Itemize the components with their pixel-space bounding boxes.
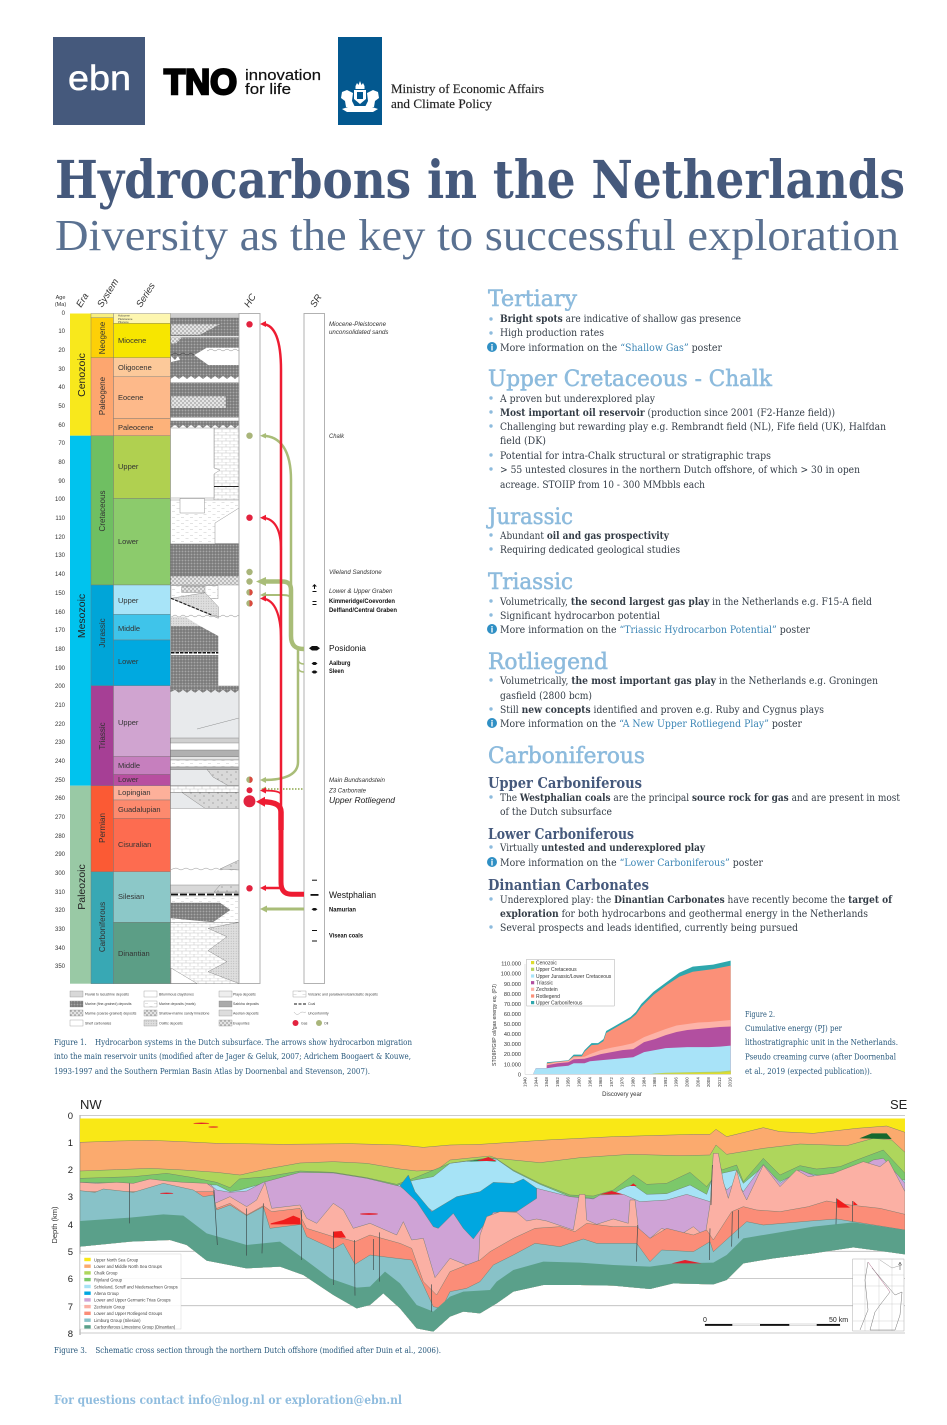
chart: cumulative energy per unit [492, 959, 733, 1098]
column headers: System [95, 277, 121, 310]
icon: info [487, 718, 497, 728]
chart y axis: 60.000 [504, 1012, 521, 1018]
chart y axis: 80.000 [504, 992, 521, 998]
text panel: Upper Cretaceous - Chalk: > 55 untested closures in the northern Dutch offshore, of which > 30 in open [500, 465, 860, 476]
source rock and reservoir labels: Miocene-Pleistocene [329, 322, 387, 328]
icon: info [487, 342, 497, 352]
legend labels: Playa deposits [233, 992, 256, 996]
series labels: Silesian [118, 892, 144, 901]
chart x axis: 2012 [717, 1077, 722, 1087]
text panel: Rotliegend: Rotliegend [488, 650, 608, 675]
age axis: 210 [55, 703, 66, 709]
age axis: 350 [55, 964, 66, 970]
age axis: 160 [55, 610, 66, 616]
text panel: Upper Cretaceous - Chalk: field (DK) [500, 436, 546, 447]
legend labels: Aeolian deposits [233, 1012, 259, 1016]
age axis: 250 [55, 778, 66, 784]
chart x axis: 2004 [695, 1077, 700, 1087]
text panel: Triassic: More information on the “Triassic Hydrocarbon Potential” poster [500, 625, 810, 636]
column headers [55, 277, 325, 310]
text panel: Triassic: Volumetrically, the second largest gas play in the Netherlands e.g. F15-A field [499, 597, 873, 608]
series column [114, 314, 170, 984]
text panel: Carboniferous: of the Dutch subsurface [500, 807, 612, 818]
legend labels: Marine deposits (marls) [159, 1002, 196, 1006]
column headers: HC [242, 292, 259, 310]
text panel: Carboniferous: Lower Carboniferous [488, 826, 634, 843]
age axis: 40 [58, 385, 66, 391]
text panel: Jurassic: Jurassic [486, 505, 573, 530]
scale bar: 0 [703, 1317, 707, 1324]
system labels: Paleogene [98, 376, 107, 415]
age axis: 230 [55, 740, 66, 746]
text panel: Rotliegend: Volumetrically, the most important gas play in the Netherlands e.g. Groningen [499, 676, 878, 687]
caption: figure 1: into the main reservoir units (modified after de Jager & Geluk, 2007; Adrichem Boogaert & Kouwe, [54, 1051, 411, 1062]
contact line: For questions contact info@nlog.nl or exploration@ebn.nl [54, 1393, 402, 1407]
logo: Ministry of Economic Affairs and Climate Policy: Ministry of Economic Affairs [391, 82, 544, 96]
depth axis: Depth (km) [50, 1206, 59, 1244]
lithology legend [70, 991, 322, 1026]
chart y axis: 20.000 [504, 1052, 521, 1058]
age axis: 200 [55, 684, 66, 690]
icon: coat of arms [341, 81, 379, 112]
text panel: Carboniferous: exploration for both hydrocarbons and geothermal energy in the Netherlands [500, 909, 868, 920]
system labels [98, 321, 107, 952]
chart x axis: Discovery year [602, 1092, 642, 1098]
series labels: Miocene [118, 336, 146, 345]
age axis: 170 [55, 628, 66, 634]
chart x axis: 1964 [587, 1077, 592, 1087]
series labels: Upper [118, 462, 139, 471]
cross section legend: Rijnland Group [94, 1277, 123, 1282]
gas migration arrows [256, 321, 304, 894]
age axis: 70 [58, 441, 66, 447]
logo: TNO innovation for life: innovation [245, 68, 321, 84]
age axis: 130 [55, 553, 66, 559]
source rock and reservoir labels [328, 322, 397, 940]
cross section legend: Lower and Upper Germanic Trias Groups [94, 1298, 171, 1303]
age axis [55, 311, 66, 970]
depth axis: 6 [68, 1274, 73, 1285]
column headers: SR [308, 292, 325, 310]
text panel: Tertiary [487, 287, 741, 354]
chart legend: Upper Carboniferous [536, 1000, 583, 1006]
chart x axis: 1956 [566, 1077, 571, 1087]
icon: info [487, 624, 497, 634]
source rock and reservoir labels: Chalk [329, 434, 345, 440]
chart x axis: 1968 [598, 1077, 603, 1087]
cross section legend: Limburg Group (Silesian) [94, 1318, 141, 1323]
cross section legend: Zechstein Group [94, 1304, 126, 1309]
age axis: 320 [55, 908, 66, 914]
chart legend: Rotliegend [536, 994, 560, 1000]
text panel: Jurassic: Requiring dedicated geological studies [500, 545, 680, 556]
era column: Paleozoic [76, 864, 88, 910]
system labels: Jurassic [98, 618, 107, 648]
cross section legend: Upper North Sea Group [94, 1257, 139, 1262]
age axis: 90 [58, 479, 66, 485]
system labels: Cretaceous [98, 491, 107, 531]
scale bar: 50 km [829, 1317, 848, 1324]
cross section legend: Carboniferous Limestone Group (Dinantian) [94, 1325, 176, 1330]
system labels: Triassic [98, 722, 107, 750]
scale bar [703, 1317, 848, 1326]
legend labels: Fluvial to lacustrine deposits [85, 992, 129, 996]
source rock and reservoir labels: Aalburg [329, 661, 351, 667]
series labels: Lower [118, 537, 139, 546]
age axis: 260 [55, 796, 66, 802]
chart y axis: 50.000 [504, 1022, 521, 1028]
chart y axis: 90.000 [504, 982, 521, 988]
faults [129, 1165, 853, 1312]
depth axis: 2 [68, 1165, 73, 1176]
series labels: Pliocene [118, 320, 129, 324]
text panel: Rotliegend: gasfield (2800 bcm) [500, 691, 592, 702]
legend labels: Shallow-marine sandy limestone [159, 1012, 209, 1016]
era column: Cenozoic [76, 353, 88, 397]
caption: figure 2: lithostratigraphic unit in the Netherlands. [745, 1038, 898, 1048]
chart legend: Triassic [536, 981, 554, 987]
source rock and reservoir labels: Z3 Carbonate [328, 788, 367, 794]
column headers: Age [56, 295, 65, 301]
series labels: Guadalupian [118, 805, 161, 814]
chart x axis: 1972 [609, 1077, 614, 1087]
text panel: Triassic: Significant hydrocarbon potential [500, 611, 660, 622]
text panel: Triassic: Triassic [488, 570, 573, 595]
chart x axis: 1988 [652, 1077, 657, 1087]
chart x axis: 2008 [706, 1077, 711, 1087]
age axis: 100 [55, 497, 66, 503]
source rock and reservoir labels: Delfland/Central Graben [329, 608, 397, 614]
age axis: 150 [55, 591, 66, 597]
age axis: 120 [55, 535, 66, 541]
legend labels: Gas [301, 1022, 308, 1026]
legend labels: Oil [324, 1022, 328, 1026]
cross section legend: Lower and Middle North Sea Groups [94, 1264, 162, 1269]
source rock and reservoir labels: Visean coals [329, 934, 364, 940]
text panel: Upper Cretaceous - Chalk: Most important oil reservoir (production since 2001 (F2-Hanze field)) [500, 408, 835, 419]
text panel: Tertiary: High production rates [500, 328, 604, 339]
icon: info: i [491, 342, 493, 352]
source rock and reservoir labels: Main Bundsandstein [329, 778, 386, 784]
source rock and reservoir labels: unconsolidated sands [329, 330, 388, 336]
text panel: Carboniferous [487, 744, 900, 934]
chart x axis: 2000 [684, 1077, 690, 1087]
cross section legend [80, 1254, 181, 1330]
text panel: Carboniferous: Upper Carboniferous [488, 775, 642, 792]
chart legend: Zechstein [536, 987, 558, 993]
cross section legend: Chalk Group [94, 1271, 118, 1276]
text panel: Jurassic: Abundant oil and gas prospectivity [499, 531, 670, 542]
cross section legend: Schieland, Scruff and Niedersachsen Groups [94, 1284, 178, 1289]
caption: figure 1 [54, 1038, 412, 1077]
age axis: 110 [55, 516, 66, 522]
legend labels: Sabkha deposits [233, 1002, 259, 1006]
system column [91, 314, 114, 984]
gas and oil fields [160, 1123, 892, 1263]
age axis: 140 [55, 572, 66, 578]
source rock and reservoir labels: Sleen [329, 669, 344, 675]
text panel: Tertiary: Bright spots are indicative of shallow gas presence [500, 314, 741, 325]
source rock and reservoir labels: Westphalian [329, 890, 376, 900]
age axis: 240 [55, 759, 66, 765]
chart x axis: 1960 [576, 1077, 582, 1087]
source rock and reservoir labels: Posidonia [329, 644, 367, 653]
text panel: Upper Cretaceous - Chalk: Upper Cretaceous - Chalk [488, 367, 773, 392]
text panel: Carboniferous: Carboniferous [488, 744, 645, 769]
chart legend: Upper Cretaceous [536, 967, 577, 973]
chart legend: Upper Jurassic/Lower Cretaceous [536, 974, 612, 980]
cross section legend: Lower and Upper Rotliegend Groups [94, 1311, 162, 1316]
chart x axis: 1992 [663, 1077, 668, 1087]
age axis: 50 [58, 404, 66, 410]
era column: Mesozoic [76, 594, 88, 638]
chart x axis: 1940 [522, 1077, 528, 1087]
age axis: 180 [55, 647, 66, 653]
source rock and reservoir labels: Upper Rotliegend [329, 795, 395, 805]
text panel: Carboniferous: More information on the “Lower Carboniferous” poster [500, 858, 763, 869]
location map inset [853, 1259, 904, 1331]
icon: info: i [491, 858, 493, 868]
SR column [304, 314, 324, 984]
text panel: Rotliegend: Still new concepts identified and proven e.g. Ruby and Cygnus plays [500, 705, 824, 716]
chart x axis: 1984 [641, 1077, 646, 1087]
chart x axis: 1996 [674, 1077, 679, 1087]
chart y axis: 30.000 [504, 1042, 521, 1048]
legend labels: Bituminous claystones [159, 992, 194, 996]
age axis: 290 [55, 852, 66, 858]
chart x axis: 1944 [533, 1077, 538, 1087]
legend labels: Marine (fine-grained) deposits [85, 1002, 132, 1006]
logo: EBN [53, 37, 145, 125]
series labels: Dinantian [118, 949, 150, 958]
era column [70, 314, 91, 984]
age axis: 270 [55, 815, 66, 821]
text panel: Carboniferous: The Westphalian coals are the principal source rock for gas and are present in most [500, 793, 900, 804]
cross section legend: Altena Group [94, 1291, 119, 1296]
chart y axis [492, 962, 521, 1078]
age axis: 60 [58, 423, 66, 429]
caption: figure 1: 1993-1997 and the Southern Permian Basin Atlas by Doornenbal and Stevenson, 2007). [54, 1066, 370, 1077]
series labels: Upper [118, 596, 139, 605]
text panel: Tertiary: More information on the “Shallow Gas” poster [500, 343, 722, 354]
chart y axis: 0 [518, 1072, 521, 1078]
column headers: Series [134, 281, 158, 310]
stacked area [533, 961, 731, 1074]
panel: stratigraphic column figure [55, 277, 397, 1026]
logo: Ministry of Economic Affairs and Climate Policy [338, 37, 544, 125]
legend labels: Evaporites [233, 1022, 250, 1026]
system labels: Neogene [98, 321, 107, 354]
source rock markers [309, 584, 320, 942]
text panel: Tertiary: Tertiary [488, 287, 578, 312]
logo: Ministry of Economic Affairs and Climate Policy: and Climate Policy [391, 97, 493, 111]
text panel: Upper Cretaceous - Chalk: Potential for intra-Chalk structural or stratigraphic traps [500, 451, 771, 462]
source rock and reservoir labels: Vlieland Sandstone [329, 570, 382, 576]
legend labels [85, 992, 378, 1026]
column headers: Era [74, 291, 91, 310]
SE label: SE [890, 1097, 908, 1112]
logo: TNO innovation for life: TNO [164, 63, 237, 102]
chart y axis: 40.000 [504, 1032, 521, 1038]
text panel: Jurassic [486, 505, 680, 556]
legend labels: Oolitic deposits [159, 1022, 183, 1026]
chart x axis: 2016 [728, 1077, 733, 1087]
age axis: 190 [55, 666, 66, 672]
series labels: Lower [118, 775, 139, 784]
age axis: 220 [55, 722, 66, 728]
depth axis [50, 1111, 905, 1340]
HC markers [244, 321, 256, 892]
depth axis: 5 [68, 1247, 73, 1258]
source rock and reservoir labels: Lower & Upper Graben [329, 589, 393, 595]
text panel: Carboniferous: Several prospects and leads identified, currently being pursued [500, 923, 799, 934]
subtitle: Diversity as the key to successful exploration [55, 211, 899, 260]
text panel: Rotliegend [487, 650, 878, 730]
chart y axis: 10.000 [504, 1062, 521, 1068]
series labels: Cisuralian [118, 840, 151, 849]
age axis: 330 [55, 927, 66, 933]
series labels: Oligocene [118, 363, 152, 372]
age axis: 0 [62, 311, 66, 317]
series labels: Middle [118, 761, 140, 770]
chart x axis: 1948 [544, 1077, 549, 1087]
caption: figure 2: Pseudo creaming curve (after Doornenbal [745, 1052, 896, 1062]
age axis: 20 [58, 348, 66, 354]
age axis: 280 [55, 834, 66, 840]
source rock and reservoir labels: Kimmeridge/Coevorden [329, 599, 395, 605]
logo: EBN: ebn [68, 59, 131, 98]
icon: info: i [491, 718, 493, 728]
caption: figure 2: et al., 2019 (expected publication)). [745, 1066, 872, 1077]
HC column [239, 314, 260, 984]
logo: TNO innovation for life [164, 63, 321, 102]
depth axis: 3 [68, 1192, 73, 1203]
chart: cross section [50, 1097, 908, 1340]
system labels: Carboniferous [98, 902, 107, 952]
system labels: Permian [98, 813, 107, 843]
text panel: Upper Cretaceous - Chalk: Challenging but rewarding play e.g. Rembrandt field (NL), Fife field (UK), Halfdan [500, 422, 887, 433]
caption: figure 3: Figure 3.Schematic cross section through the northern Dutch offshore (modified after Duin et al., 2006). [54, 1345, 441, 1356]
chart y axis: 110.000 [501, 962, 521, 968]
series labels: Eocene [118, 393, 143, 402]
depth axis: 0 [68, 1111, 73, 1122]
series labels: Middle [118, 624, 140, 633]
legend labels: Coal [308, 1002, 315, 1006]
chart y axis: 100.000 [501, 972, 521, 978]
depth axis: 1 [68, 1138, 73, 1149]
age axis: 10 [58, 329, 66, 335]
series labels: Holocene [118, 314, 130, 318]
chart x axis: 1980 [630, 1077, 636, 1087]
age axis: 300 [55, 871, 66, 877]
chart x axis [522, 1077, 733, 1098]
age axis: 340 [55, 946, 66, 952]
NW label: NW [80, 1097, 102, 1112]
series labels: Pleistocene [118, 317, 133, 321]
caption: figure 2 [745, 1010, 898, 1077]
chart legend [527, 959, 614, 1006]
text panel: Carboniferous: Virtually untested and underexplored play [499, 843, 706, 854]
series labels: Paleocene [118, 423, 153, 432]
depth axis: 4 [68, 1220, 73, 1231]
caption: figure 2: Cumulative energy (PJ) per [745, 1023, 843, 1034]
text panel: Rotliegend: More information on the “A New Upper Rotliegend Play” poster [500, 719, 802, 730]
age axis: 30 [58, 367, 66, 373]
chart x axis: 1976 [620, 1077, 625, 1087]
age axis: 310 [55, 890, 66, 896]
logo: TNO innovation for life: for life [245, 82, 291, 98]
icon: info: i [491, 624, 493, 634]
oil migration arrows [256, 433, 304, 912]
series labels: Lopingian [118, 788, 151, 797]
chart y axis: STOIIP/GIIP oil/gas energy eq. (PJ) [492, 984, 498, 1066]
geological layers [80, 1118, 905, 1338]
chart x axis: 1952 [555, 1077, 560, 1087]
caption: figure 2: Figure 2. [745, 1010, 775, 1020]
column headers: (Ma) [55, 302, 66, 308]
chart legend: Cenozoic [536, 960, 557, 966]
chart y axis: 70.000 [504, 1002, 521, 1008]
depth axis: 7 [68, 1302, 73, 1313]
text panel: Upper Cretaceous - Chalk: A proven but underexplored play [499, 394, 655, 405]
text panel: Triassic [487, 570, 873, 636]
series labels: Upper [118, 718, 139, 727]
icon: info [487, 857, 497, 868]
legend labels: Volcanic and paralava/volcaniclastic deposits [308, 992, 378, 996]
text panel: Upper Cretaceous - Chalk [488, 367, 887, 491]
text panel: Carboniferous: Dinantian Carbonates [488, 877, 649, 894]
text panel: Upper Cretaceous - Chalk: acreage. STOIIP from 10 - 300 MMbbls each [500, 480, 706, 491]
legend labels: Unconformity [308, 1012, 329, 1016]
caption: figure 1: Figure 1.Hydrocarbon systems in the Dutch subsurface. The arrows show hydrocarbon migration [54, 1038, 412, 1048]
depth axis: 8 [68, 1329, 73, 1340]
lithology column [170, 314, 239, 984]
legend labels: Marine (coarse-grained) deposits [85, 1012, 137, 1016]
source rock and reservoir labels: Namurian [329, 908, 356, 914]
age axis: 80 [58, 460, 66, 466]
legend labels: Shelf carbonates [85, 1022, 112, 1026]
text panel: Carboniferous: Underexplored play: the Dinantian Carbonates have recently become the target of [500, 895, 893, 906]
series labels [118, 314, 161, 958]
series labels: Lower [118, 657, 139, 666]
